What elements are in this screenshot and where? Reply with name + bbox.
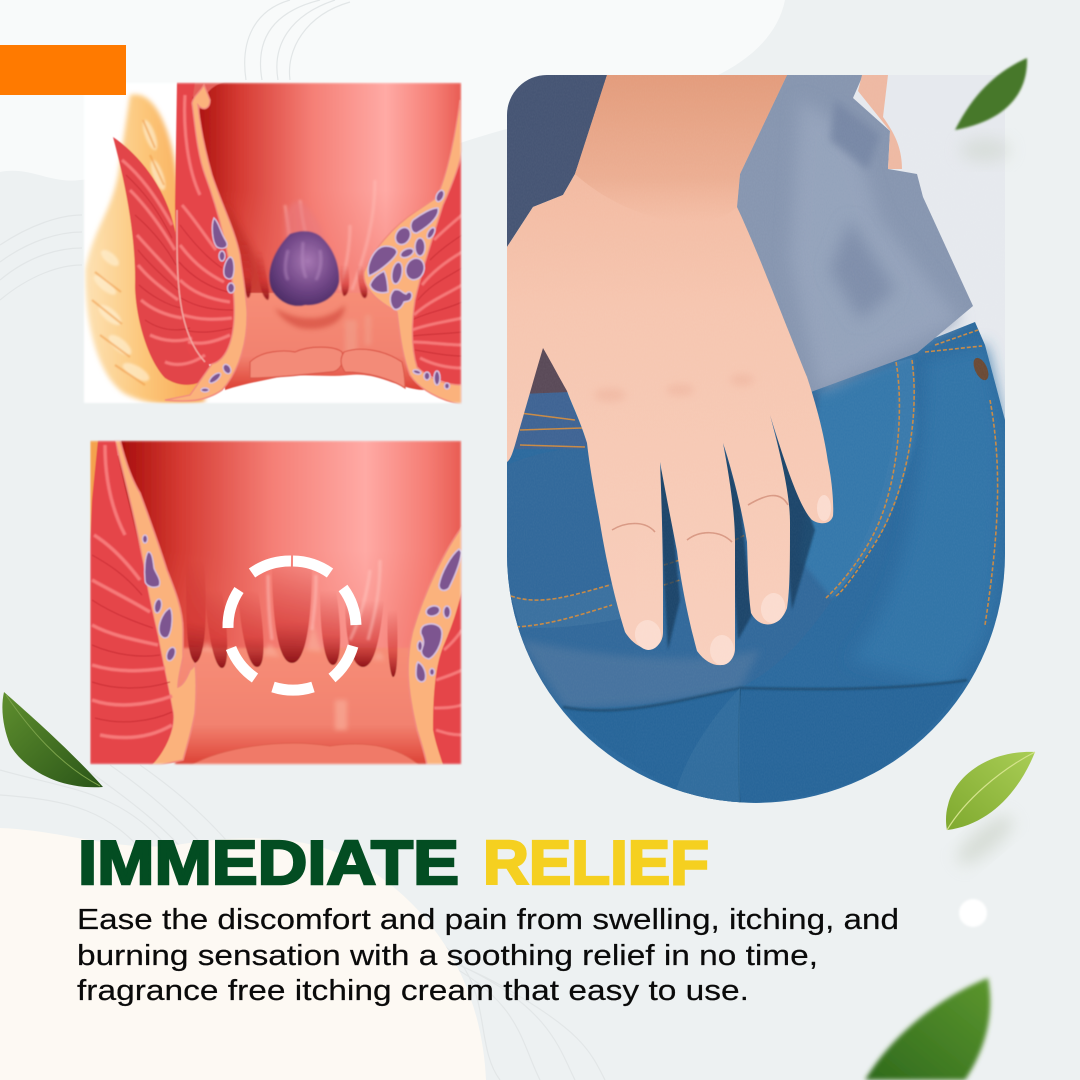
back-hand fingers	[858, 75, 902, 169]
hemorrhoid	[269, 201, 339, 306]
panel: healed anatomy illustration	[90, 440, 462, 766]
small folds	[245, 258, 368, 300]
lower canal	[175, 648, 440, 766]
dashed highlight ring	[228, 561, 356, 690]
leaf: middle right	[946, 752, 1035, 872]
body text: burning sensation with a soothing relief in no time,	[77, 940, 818, 972]
left purple veins	[201, 218, 234, 392]
waistband	[515, 388, 587, 449]
pocket band	[511, 582, 625, 628]
right muscle	[410, 160, 462, 385]
leaf: top right	[955, 58, 1027, 162]
dot	[959, 899, 987, 927]
fabric grain	[507, 75, 1005, 805]
jeans	[507, 322, 1005, 810]
title: IMMEDIATE	[78, 829, 459, 898]
rectal lumen	[192, 82, 462, 294]
right submucosal band	[364, 100, 462, 405]
background contour lines	[0, 0, 605, 1080]
seam band	[830, 358, 915, 598]
lower canal tissue	[225, 293, 425, 390]
perianal fat	[85, 94, 205, 405]
muscle highlights	[92, 445, 172, 738]
muscle highlights	[122, 95, 232, 364]
cream blob	[0, 828, 486, 1080]
body text	[77, 904, 899, 1007]
dark fold shading	[229, 214, 273, 293]
folds	[186, 560, 398, 677]
hand	[507, 75, 833, 665]
body text: Ease the discomfort and pain from swelling, itching, and	[77, 904, 899, 936]
dark shirt back	[507, 75, 610, 247]
finger shadows	[658, 420, 815, 650]
left veins	[142, 535, 177, 662]
knuckle lines	[612, 496, 788, 542]
photo backdrop	[507, 75, 1005, 805]
title	[78, 829, 709, 898]
title: RELIEF	[483, 829, 709, 898]
grey shirt	[725, 75, 973, 396]
fingernails	[633, 495, 831, 665]
right band	[408, 527, 462, 765]
lumen	[117, 440, 462, 650]
outer muscle	[113, 137, 212, 385]
pocket seam stitches	[511, 330, 998, 627]
leaf: left	[2, 692, 103, 787]
inner muscle	[175, 82, 234, 364]
body text: fragrance free itching cream that easy to use.	[77, 975, 749, 1007]
right muscle	[433, 590, 462, 765]
orange tab	[0, 45, 126, 95]
left muscle	[90, 440, 173, 765]
wrist tone	[575, 75, 787, 222]
left band	[115, 440, 196, 765]
photo: hand on jeans	[507, 75, 1005, 810]
jeans left panel	[507, 556, 550, 694]
left submucosal band	[165, 85, 247, 401]
right purple veins	[368, 189, 450, 389]
jeans lower crease	[563, 680, 967, 805]
leaf: bottom right	[865, 978, 990, 1080]
right veins	[416, 549, 462, 682]
panel: hemorrhoid anatomy illustration	[80, 80, 464, 406]
